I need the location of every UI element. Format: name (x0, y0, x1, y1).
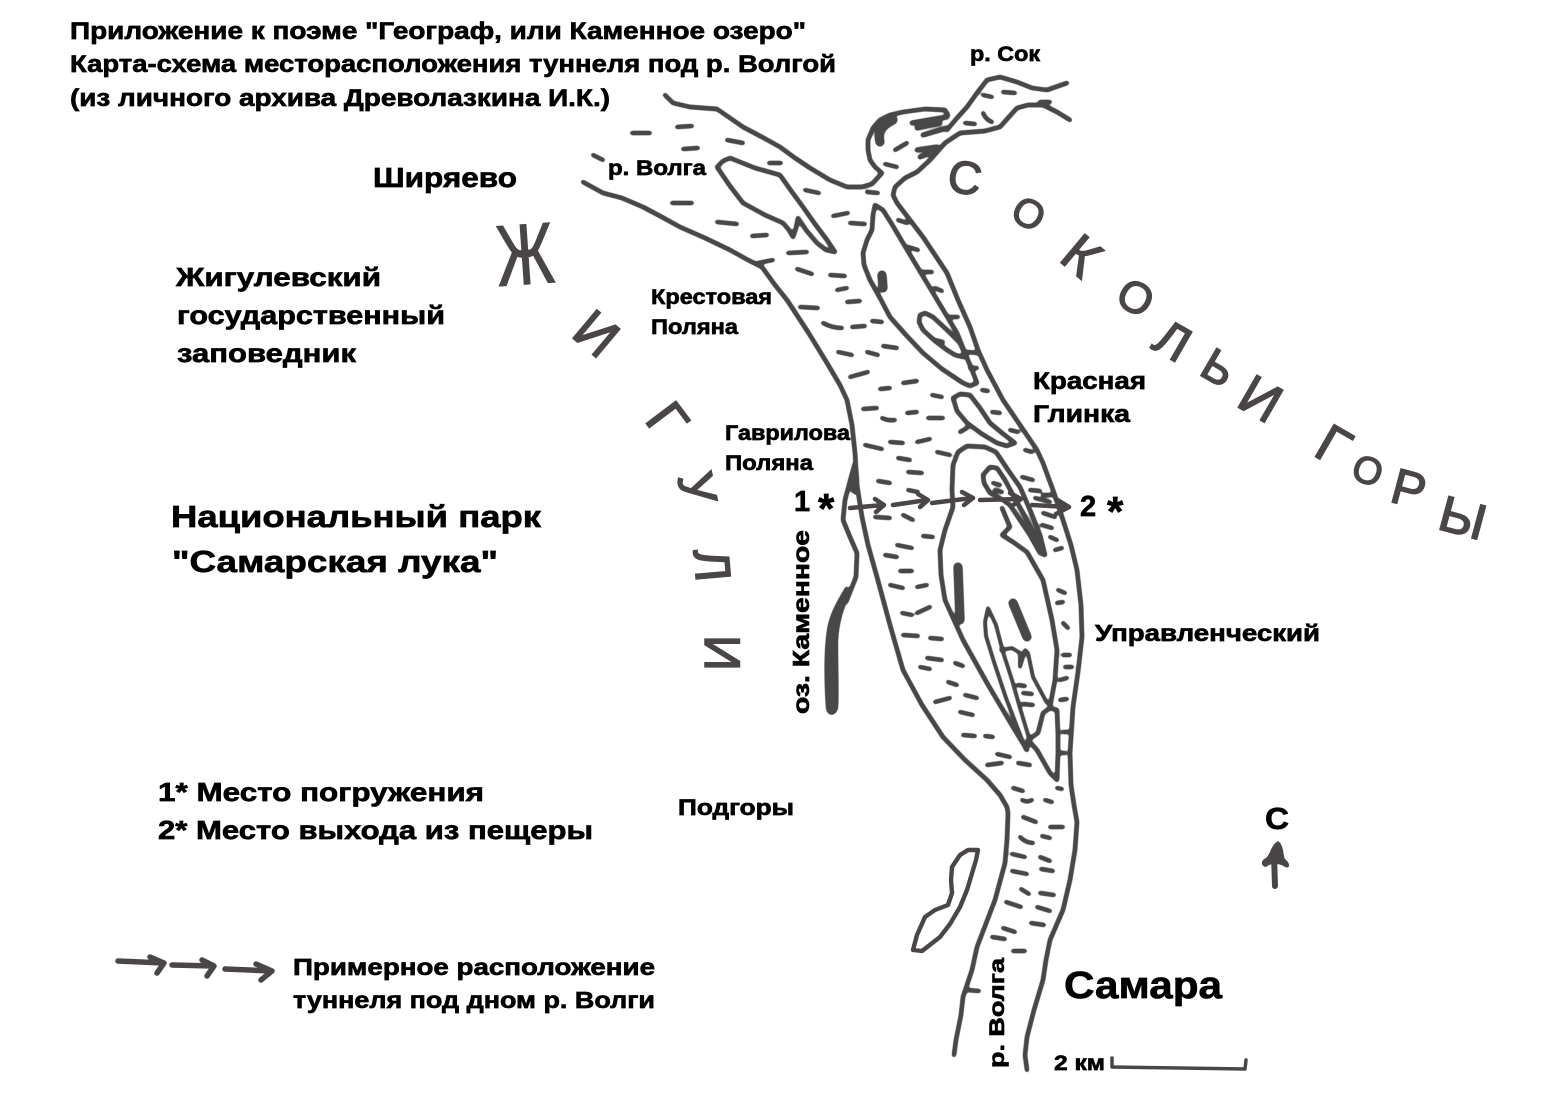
large island right edge (1002, 508, 1057, 707)
handwritten: Zhiguli: Л (683, 546, 741, 584)
handwritten: Sokoli mountains: И (1228, 364, 1292, 435)
label: national park (171, 499, 542, 579)
river bank: lower left of Volga (583, 182, 1008, 1055)
handwritten: Sokoli mountains: Р (1385, 458, 1432, 520)
marker 1: * (818, 485, 835, 532)
title block: Приложение к поэме "Географ, или Каменное озеро" (70, 18, 806, 45)
handwritten: Sokoli mountains: О (1108, 268, 1162, 328)
river bank: Sok upper (947, 77, 1067, 130)
label: Krasnaya Glinka (1033, 368, 1146, 428)
river map: Volga and Sok (583, 77, 1082, 1070)
handwritten: Sokoli mountains: С (944, 149, 986, 206)
label: Zhiguli reserve: заповедник (177, 338, 357, 368)
handwritten: Sokoli mountains: Ь (1193, 337, 1245, 398)
handwritten: Zhiguli: У (666, 467, 728, 510)
island 1 (717, 158, 835, 252)
large island inner finger (983, 467, 1045, 555)
finger island (985, 608, 1029, 750)
river bank: Sok lower and right bank of Volga (893, 105, 1082, 1070)
legend: tunnel arrows (118, 957, 272, 980)
handwritten: Zhiguli: Г (634, 391, 700, 451)
legend: tunnel text: туннеля под дном р. Волги (293, 987, 655, 1013)
lake Kamennoe (825, 461, 859, 715)
label: Krestovaya Polyana: Поляна (651, 316, 738, 339)
label: Samara: Самара (1064, 965, 1223, 1007)
handwritten: Sokoli mountains: О (1346, 447, 1388, 496)
north arrow (1262, 841, 1289, 886)
large island outline (940, 446, 1045, 750)
scale bar (1112, 1058, 1246, 1069)
label: lake Kamennoe: оз. Каменное (788, 530, 814, 714)
handwritten: Zhiguli: И (562, 299, 630, 370)
north letter: С (1265, 801, 1289, 836)
marker 2 (1080, 488, 1124, 535)
label: Sok river: р. Сок (970, 43, 1041, 66)
jagged shore (1001, 648, 1047, 703)
scale label: 2 км (1054, 1052, 1105, 1075)
marker 1 (794, 485, 835, 532)
pond near Samara (913, 850, 978, 951)
label: Gavrilova Polyana (725, 422, 850, 475)
label: Krestovaya Polyana: Крестовая (651, 286, 772, 309)
label: Krasnaya Glinka: Красная (1033, 368, 1146, 395)
river bank: upper left of Volga into fork (665, 95, 948, 187)
marker 2: 2 (1080, 491, 1096, 523)
water dashes (593, 92, 1072, 991)
island 2 inner (919, 313, 964, 357)
island bottom tip (1028, 708, 1058, 780)
label: Shiryaevo: Ширяево (373, 162, 517, 193)
legend: points (158, 777, 593, 845)
marker 1: 1 (794, 486, 810, 518)
handwritten: Zhiguli (493, 204, 750, 671)
label: national park: Национальный парк (171, 499, 542, 534)
handwritten: Sokoli mountains: Ы (1433, 485, 1492, 551)
title block: Карта-схема месторасположения туннеля под р. Волгой (70, 51, 836, 78)
title block (70, 18, 836, 112)
label: Volga river bottom: р. Волга (986, 958, 1009, 1068)
handwritten: Sokoli mountains: Л (1144, 308, 1201, 373)
marker 2: * (1107, 488, 1124, 535)
label: Gavrilova Polyana: Поляна (725, 452, 813, 475)
handwritten: Sokoli mountains: О (1004, 187, 1053, 241)
legend: points: 2* Место выхода из пещеры (158, 815, 593, 845)
fork lines (879, 117, 947, 157)
label: Upravlenchesky: Управленческий (1095, 620, 1320, 646)
label: Gavrilova Polyana: Гаврилова (725, 422, 850, 445)
label: Zhiguli reserve (175, 262, 445, 368)
legend: tunnel text (293, 954, 655, 1013)
label: Volga river top: р. Волга (608, 157, 706, 180)
label: Krasnaya Glinka: Глинка (1033, 401, 1131, 428)
handwritten: Sokoli mountains: К (1050, 223, 1113, 290)
handwritten: Sokoli mountains: Г (1306, 413, 1361, 480)
title block: (из личного архива Древолазкина И.К.) (70, 85, 610, 112)
label: Podgory: Подгоры (678, 795, 794, 820)
handwritten: Zhiguli: Ж (493, 204, 557, 304)
island 3 (953, 394, 1015, 446)
island 2 (863, 205, 977, 386)
label: Krestovaya Polyana (651, 286, 772, 339)
legend: points: 1* Место погружения (158, 777, 484, 807)
handwritten: Sokoli mountains (944, 149, 1492, 551)
legend: tunnel text: Примерное расположение (293, 954, 655, 980)
label: national park: "Самарская лука" (172, 544, 498, 579)
label: Zhiguli reserve: Жигулевский (175, 262, 381, 292)
label: Zhiguli reserve: государственный (177, 300, 445, 330)
thick island marks (882, 275, 1027, 637)
tunnel arrows (850, 492, 1069, 514)
handwritten: Zhiguli: И (694, 635, 750, 671)
